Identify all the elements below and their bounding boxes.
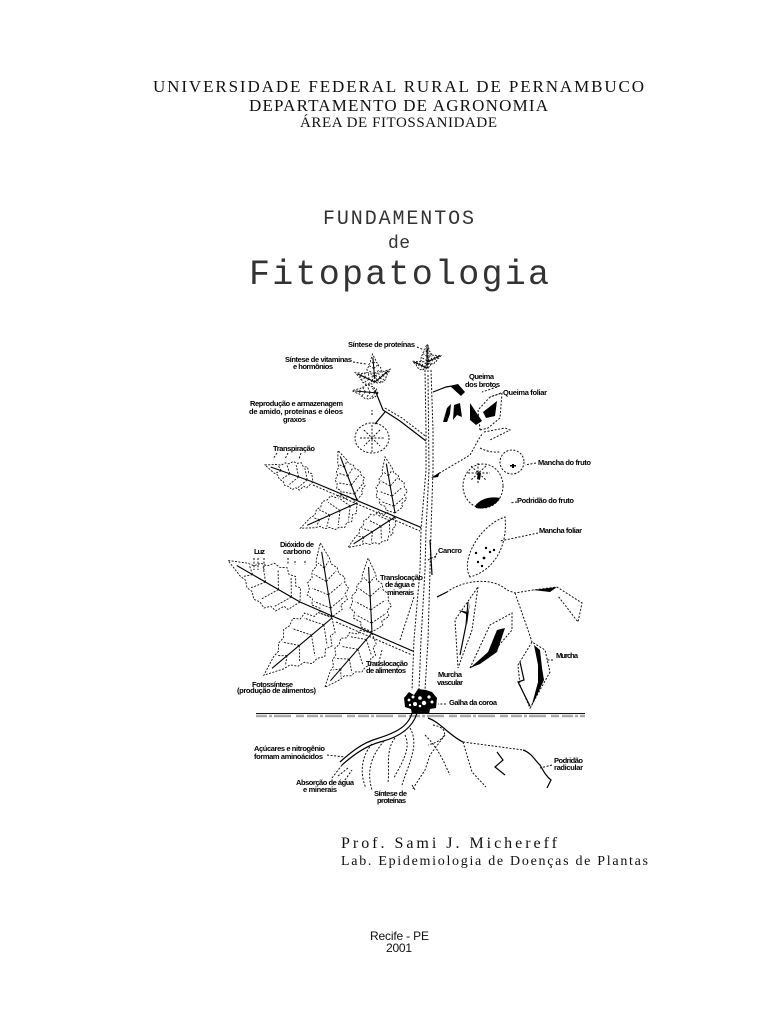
header: university: ÁREA DE FITOSSANIDADE xyxy=(300,114,497,131)
author: Prof. Sami J. Michereff xyxy=(341,835,558,852)
diagram labels: e hormônios xyxy=(293,362,333,371)
diagram labels: Síntese de xyxy=(374,789,407,798)
diagram labels: Translocação xyxy=(380,573,423,582)
diagram labels xyxy=(237,340,591,805)
diagram labels: Translocação xyxy=(366,659,408,668)
diagram labels: de água e xyxy=(385,580,415,589)
diagram labels: Podridão do fruto xyxy=(517,496,574,505)
diagram labels: Murcha xyxy=(556,651,579,660)
main stem xyxy=(412,345,433,690)
left branches xyxy=(300,390,428,680)
author: Lab. Epidemiologia de Doenças de Plantas xyxy=(341,854,648,869)
storage organ leaf xyxy=(355,412,389,453)
diagram labels: Mancha do fruto xyxy=(538,458,591,467)
place and year xyxy=(370,929,429,955)
diagram labels: minerais xyxy=(387,588,414,597)
roots xyxy=(332,713,551,790)
diagram labels: Síntese de proteínas xyxy=(348,340,415,349)
diagram labels: Síntese de vitaminas xyxy=(285,355,352,364)
diagram labels: radicular xyxy=(554,763,583,772)
diagram labels: Galha da coroa xyxy=(449,698,498,707)
diagram labels: Dióxido de xyxy=(280,540,314,549)
header: university xyxy=(153,77,644,131)
diagram labels: formam aminoácidos xyxy=(254,752,323,761)
diagram labels: carbono xyxy=(283,547,311,556)
diagram labels: Luz xyxy=(254,547,265,556)
title: FUNDAMENTOS xyxy=(323,208,474,231)
diagram labels: graxos xyxy=(283,415,306,424)
gall at crown xyxy=(404,689,437,714)
diagram labels: de amido, proteínas e óleos xyxy=(249,407,343,416)
title: de xyxy=(388,234,410,254)
title xyxy=(249,208,549,295)
diagram labels: Absorção de água xyxy=(296,778,355,787)
place and year: 2001 xyxy=(386,941,412,955)
right shoots and diseased parts xyxy=(431,384,524,577)
diagram labels: Queima xyxy=(469,372,495,381)
diagram labels: dos brotos xyxy=(465,380,500,389)
diagram labels: Murcha xyxy=(438,670,463,679)
left leaves xyxy=(216,344,443,701)
diagram labels: de alimentos xyxy=(366,666,406,675)
wilted leaves xyxy=(437,581,582,708)
diagram labels: (produção de alimentos) xyxy=(237,686,316,695)
plant diagram xyxy=(216,340,591,805)
diagram labels: Queima foliar xyxy=(503,388,547,397)
header: university: DEPARTAMENTO DE AGRONOMIA xyxy=(249,96,549,115)
diagram labels: proteínas xyxy=(377,796,406,805)
header: university: UNIVERSIDADE FEDERAL RURAL DE PERNAMBUCO xyxy=(153,77,644,96)
author xyxy=(341,835,648,869)
soil line xyxy=(256,714,585,716)
diagram labels: vascular xyxy=(437,678,463,687)
title: Fitopatologia xyxy=(249,255,549,295)
diagram labels: Fotossíntese xyxy=(252,680,293,689)
leader lines xyxy=(254,347,553,790)
diagram labels: Reprodução e armazenagem xyxy=(250,399,343,408)
diagram labels: Transpiração xyxy=(273,444,315,453)
diagram labels: e minerais xyxy=(303,785,337,794)
diagram labels: Mancha foliar xyxy=(539,526,582,535)
diagram labels: Cancro xyxy=(438,546,462,555)
diagram labels: Açúcares e nitrogênio xyxy=(254,744,325,753)
diagram labels: Podridão xyxy=(554,756,583,765)
place and year: Recife - PE xyxy=(370,929,429,943)
